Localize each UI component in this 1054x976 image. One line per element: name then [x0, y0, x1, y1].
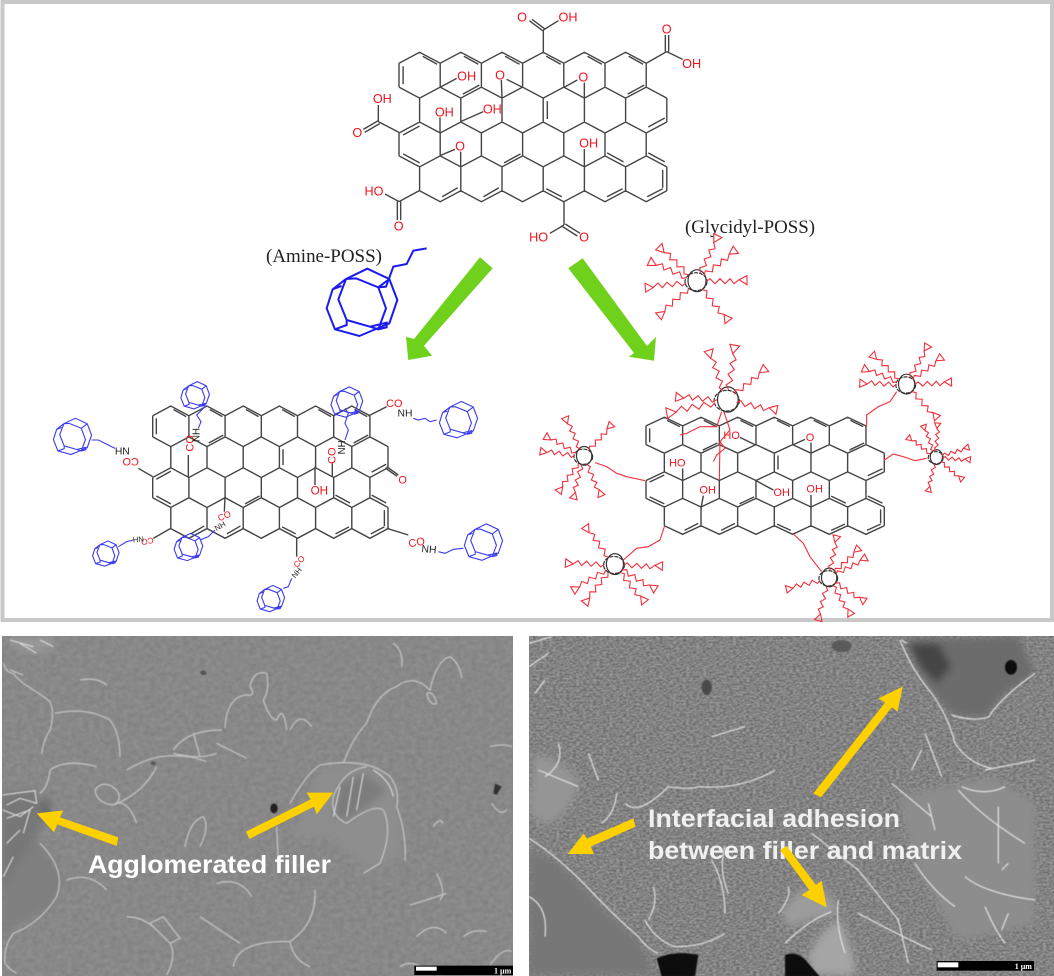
SEM surface features — [529, 637, 1035, 976]
hydroxyl groups and chain links: OH — [699, 485, 716, 497]
star F — [785, 535, 868, 621]
SEM surface features — [2, 640, 512, 975]
soft tonal patches — [2, 637, 403, 940]
panel: SEM micrograph, interfacial adhesion — [529, 636, 1054, 976]
amide substituents: CO — [122, 455, 139, 467]
oxygen functional groups: OH — [579, 137, 598, 151]
oxygen functional groups: OH — [435, 105, 454, 119]
oxygen functional groups: O — [578, 71, 588, 85]
molecule: Amine-POSS functionalised graphene — [53, 382, 503, 612]
graphene lattice — [153, 406, 388, 538]
oxygen functional groups: HO — [529, 231, 548, 245]
icon: Glycidyl-POSS star — [645, 234, 747, 324]
arrows: agglomerated filler — [37, 793, 333, 846]
oxygen functional groups: O — [662, 23, 672, 37]
star C — [906, 423, 971, 492]
arrow: green right — [568, 258, 656, 361]
star E — [565, 524, 663, 606]
scale bar: 1 µm — [1015, 962, 1032, 971]
amide substituents: NH — [115, 444, 130, 455]
oxygen functional groups: OH — [682, 57, 701, 71]
amide substituents: CO — [386, 398, 403, 410]
icon: Amine-POSS cage — [327, 248, 427, 336]
soft tonal patches — [529, 637, 1035, 975]
label: Interfacial adhesion between filler and matrix: between filler and matrix — [648, 837, 962, 865]
arrow: green left — [406, 257, 493, 360]
amide substituents: OH — [311, 485, 328, 498]
molecule: Glycidyl-POSS functionalised graphene — [540, 343, 971, 621]
star A — [666, 344, 778, 418]
oxygen functional groups: OH — [373, 92, 392, 106]
amide substituents: CO — [291, 553, 307, 569]
amide substituents: NH — [421, 544, 437, 556]
amide substituents: CO — [140, 535, 154, 547]
oxygen functional groups: OH — [559, 11, 577, 25]
amide substituents: NH — [191, 428, 202, 442]
hydroxyl groups and chain links: OH — [806, 484, 823, 496]
oxygen functional groups — [352, 11, 701, 245]
scale bar — [937, 961, 1034, 971]
graphene lattice — [646, 417, 884, 534]
blue POSS cages — [53, 382, 503, 612]
graphene lattice — [399, 52, 667, 202]
star D — [540, 416, 615, 500]
amide substituents: NH — [290, 566, 304, 580]
scale bar: 1 µm — [494, 966, 512, 975]
amide substituents: CO — [408, 536, 426, 550]
oxygen functional groups: O — [517, 11, 527, 25]
amide substituents: NH — [398, 408, 412, 419]
oxygen functional groups: O — [394, 219, 404, 233]
label: Interfacial adhesion between filler and matrix: Interfacial adhesion — [648, 805, 900, 833]
amide substituents: CO — [185, 435, 197, 452]
oxygen functional groups: O — [579, 231, 589, 245]
amide substituents: NH — [337, 440, 348, 454]
arrows: interfacial adhesion — [568, 687, 903, 907]
hydroxyl groups and chain links: O — [806, 432, 815, 444]
hydroxyl groups and chain links: OH — [773, 487, 790, 499]
hydroxyl groups and chain links: HO — [723, 430, 740, 442]
oxygen functional groups: O — [352, 126, 362, 140]
panel: reaction scheme frame — [2, 2, 1052, 620]
amide substituents: CO — [216, 509, 233, 523]
oxygen functional groups: OH — [483, 103, 502, 117]
amide substituents: NH — [213, 519, 227, 533]
amide substituents: O — [398, 474, 407, 486]
amide substituents — [92, 398, 463, 588]
hydroxyl groups and chain links: HO — [669, 457, 686, 469]
amide substituents: CO — [326, 447, 338, 464]
oxygen functional groups: O — [495, 68, 505, 82]
amide substituents: NH — [132, 534, 144, 544]
star B — [860, 343, 952, 421]
label: Glycidyl-POSS: (Glycidyl-POSS) — [685, 217, 815, 238]
oxygen functional groups: HO — [365, 184, 384, 198]
oxygen functional groups: OH — [457, 69, 476, 83]
oxygen functional groups: O — [455, 139, 465, 153]
hydroxyl groups and chain links — [595, 392, 927, 572]
scale bar — [414, 966, 514, 975]
label: Agglomerated filler: Agglomerated filler — [88, 851, 331, 879]
molecule: graphene oxide — [352, 11, 701, 245]
panel: SEM micrograph, agglomerated filler — [2, 636, 514, 976]
label: Amine-POSS: (Amine-POSS) — [266, 246, 382, 267]
